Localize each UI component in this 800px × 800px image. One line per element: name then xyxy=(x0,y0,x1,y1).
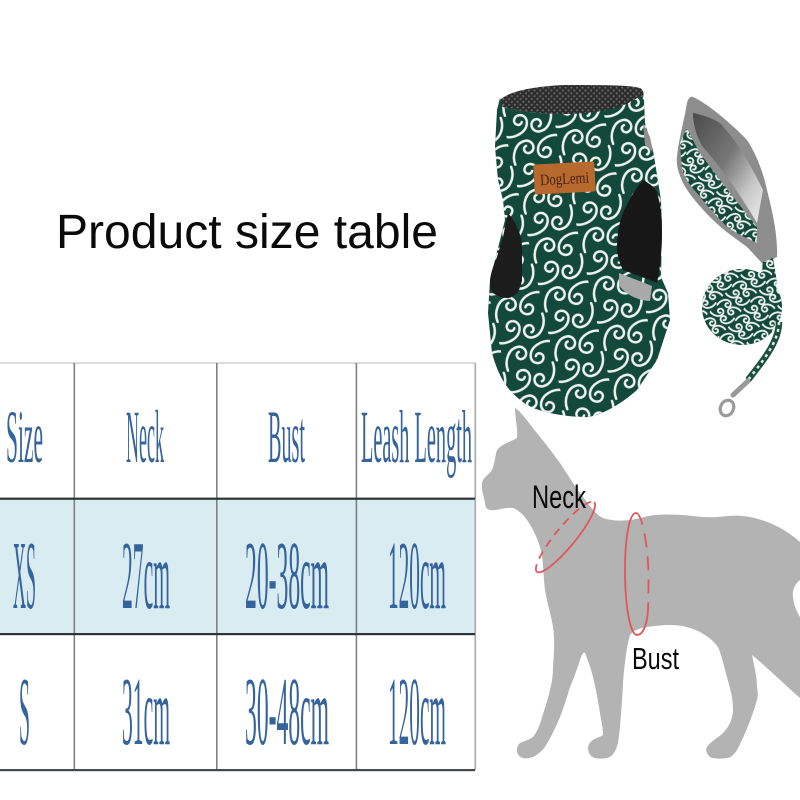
table row XS xyxy=(13,522,446,630)
table header row: Neck xyxy=(126,396,164,479)
title: Product size table xyxy=(56,206,438,259)
table header row: Bust xyxy=(268,396,305,479)
vest side strap xyxy=(643,123,653,152)
leash strap to coil xyxy=(758,258,777,298)
table row S: 30-48cm xyxy=(245,658,329,766)
vest right leg opening xyxy=(617,180,662,283)
table header row xyxy=(6,396,472,479)
vest grey trim xyxy=(619,273,652,301)
brand tag: DogLemi xyxy=(540,170,590,189)
brand tag xyxy=(533,161,596,195)
product photo: leash xyxy=(677,97,782,418)
infographic canvas: 120cm xyxy=(388,658,446,766)
table row S: S xyxy=(19,658,30,766)
vest body xyxy=(488,96,670,417)
infographic canvas: Leash Length xyxy=(361,396,472,479)
leash handle inner padding xyxy=(693,113,763,223)
coiled leash xyxy=(702,269,782,345)
infographic canvas: 120cm xyxy=(388,522,446,630)
neck measuring ring xyxy=(529,496,602,578)
table row XS: 20-38cm xyxy=(245,522,329,630)
leash handle grey border xyxy=(677,97,777,264)
table row XS: 27cm xyxy=(122,522,170,630)
product photo: harness vest xyxy=(488,85,670,417)
vest collar mesh xyxy=(500,85,644,114)
highlighted row XS xyxy=(0,499,475,634)
table grid xyxy=(0,362,476,771)
cat measurement diagram xyxy=(482,408,800,759)
bust measuring ring xyxy=(625,513,648,635)
cat silhouette xyxy=(482,408,800,759)
size table xyxy=(0,362,476,771)
table row XS: XS xyxy=(13,522,36,630)
bust label: Bust xyxy=(632,641,679,676)
table header row: Size xyxy=(6,396,43,479)
leash handle patterned strip xyxy=(680,128,757,243)
table row S xyxy=(19,658,446,766)
leash tail xyxy=(748,322,779,380)
neck label: Neck xyxy=(532,479,587,515)
vest left leg opening xyxy=(490,213,522,298)
vest swirl pattern xyxy=(488,96,670,417)
metal clasp xyxy=(718,381,748,418)
table row S: 31cm xyxy=(122,658,170,766)
